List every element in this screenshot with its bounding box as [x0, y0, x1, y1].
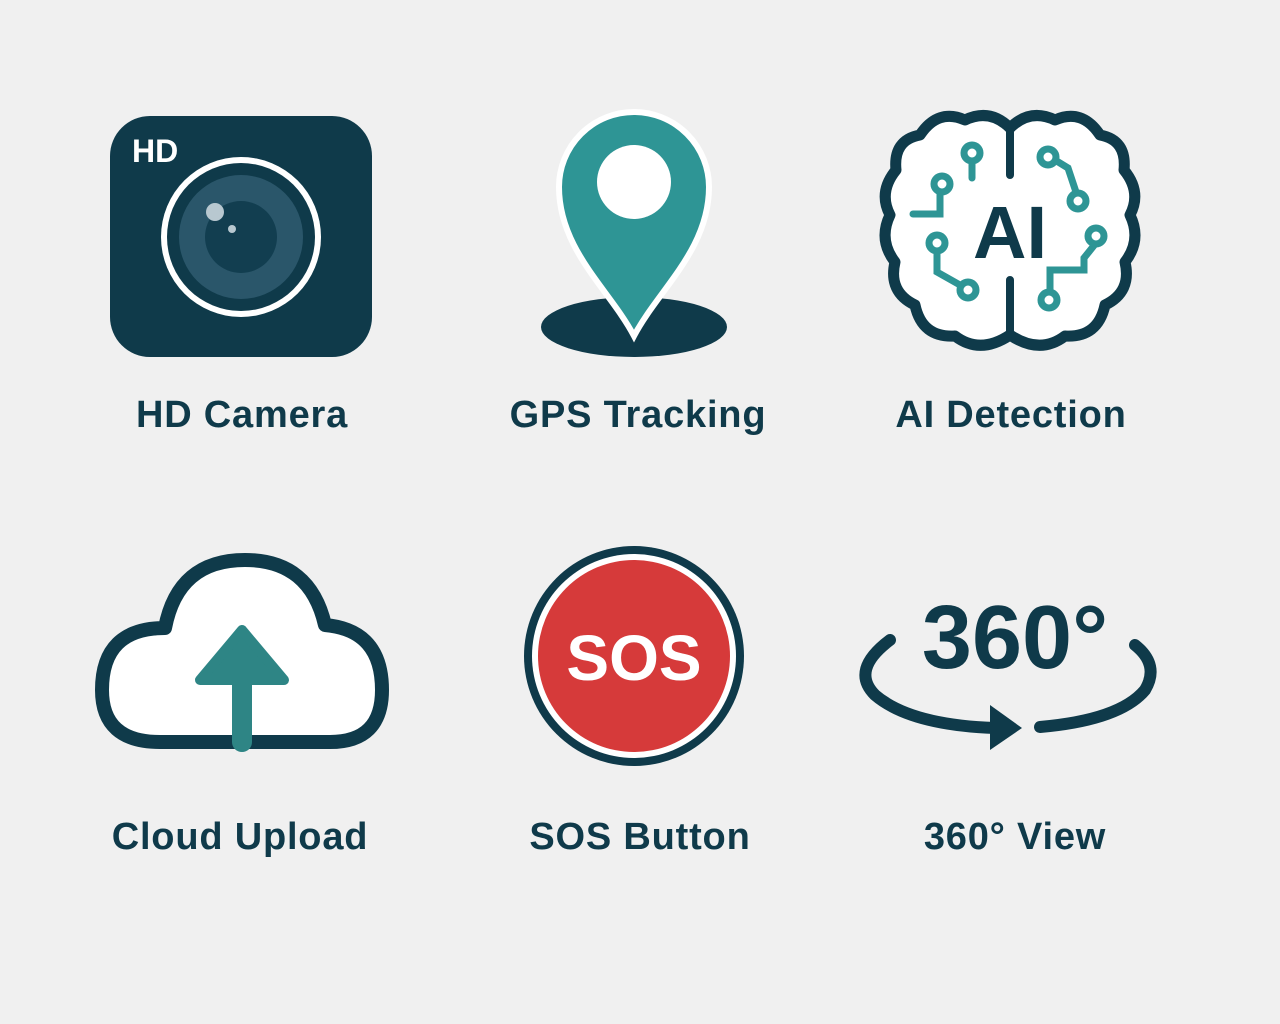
icon: SOS button: SOS — [566, 622, 702, 694]
icon: 360 view — [865, 588, 1151, 750]
icon: 360 view: 360° — [922, 588, 1108, 688]
icon: SOS button — [524, 546, 744, 766]
icon: HD camera — [110, 116, 372, 357]
label: AI Detection: AI Detection — [895, 394, 1127, 436]
label: GPS Tracking: GPS Tracking — [510, 394, 766, 436]
label: HD Camera: HD Camera — [136, 394, 348, 436]
label: SOS Button: SOS Button — [529, 816, 751, 858]
label: Cloud Upload: Cloud Upload — [112, 816, 368, 858]
label: 360° View: 360° View — [924, 816, 1106, 858]
icon: cloud upload — [102, 560, 382, 742]
icon: AI brain — [885, 116, 1135, 345]
icon: GPS pin — [541, 112, 727, 357]
icon: HD camera: HD — [132, 133, 178, 169]
icon: AI brain: AI — [973, 191, 1047, 274]
